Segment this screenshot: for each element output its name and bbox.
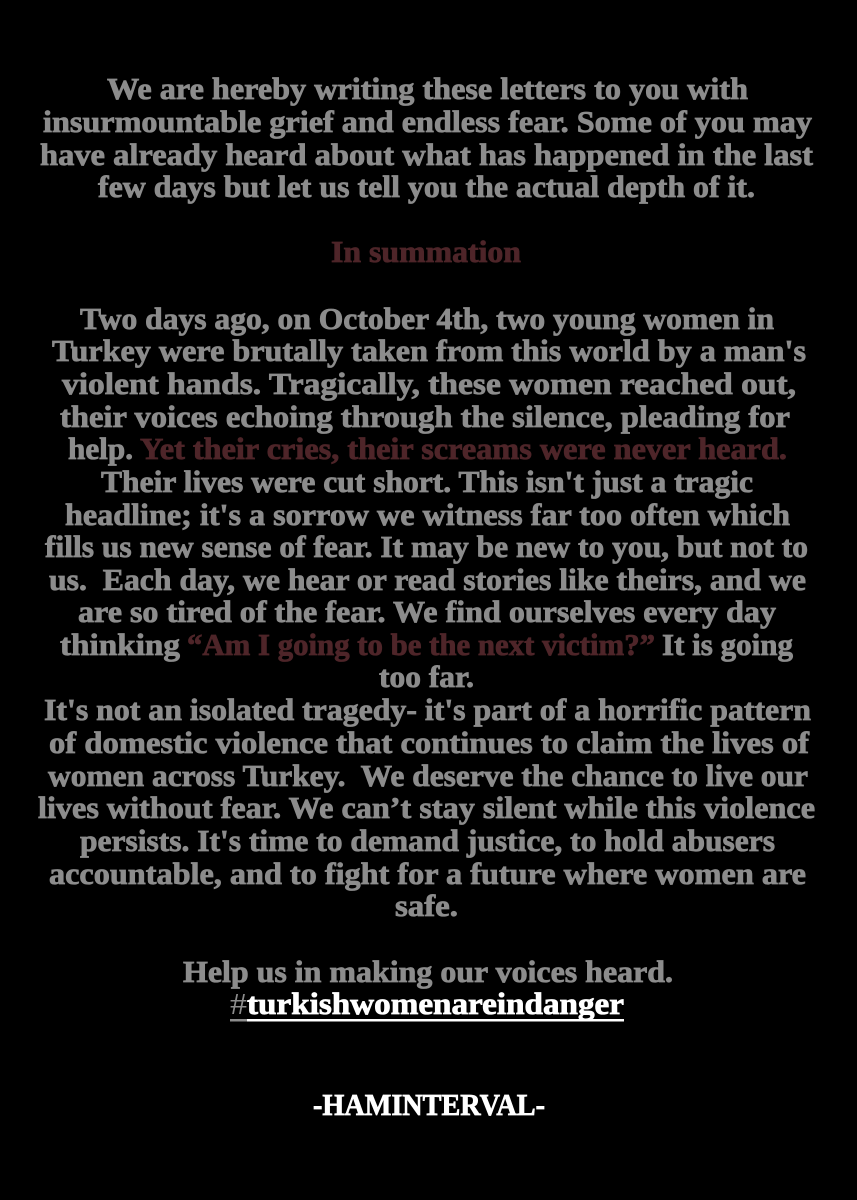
intro paragraph <box>40 71 814 204</box>
main paragraph one: are so tired of the fear. We find ourselves every day <box>78 594 777 629</box>
main paragraph one: Turkey were brutally taken from this world by a man's <box>52 333 806 368</box>
main paragraph one: help. <box>68 431 133 466</box>
main paragraph one: too far. <box>379 659 474 694</box>
main paragraph one: us. Each day, we hear or read stories like theirs, and we <box>49 562 806 597</box>
main paragraph two: accountable, and to fight for a future where women are <box>49 856 806 891</box>
main paragraph two: of domestic violence that continues to claim the lives of <box>49 725 810 760</box>
hashtag: turkishwomenareindanger <box>247 986 624 1021</box>
main paragraph one: violent hands. Tragically, these women reached out, <box>62 366 796 401</box>
main paragraph one: Yet their cries, their screams were never heard. <box>140 431 787 466</box>
signature: -HAMINTERVAL- <box>313 1087 545 1122</box>
intro paragraph: We are hereby writing these letters to you with <box>107 71 748 106</box>
main paragraph two: persists. It's time to demand justice, to hold abusers <box>80 823 775 858</box>
main paragraph two: It's not an isolated tragedy- it's part of a horrific pattern <box>44 692 811 727</box>
main paragraph one: headline; it's a sorrow we witness far too often which <box>65 497 790 532</box>
hashtag: # <box>230 986 247 1021</box>
main paragraph two: women across Turkey. We deserve the chance to live our <box>48 758 808 793</box>
main paragraph one: thinking <box>60 627 181 662</box>
main paragraph one <box>45 301 808 694</box>
main paragraph two <box>38 692 815 923</box>
main paragraph two: lives without fear. We can’t stay silent while this violence <box>38 790 815 825</box>
main paragraph one: fills us new sense of fear. It may be new to you, but not to <box>45 529 808 564</box>
main paragraph one: “Am I going to be the next victim?” <box>187 627 655 662</box>
intro paragraph: few days but let us tell you the actual depth of it. <box>98 169 755 204</box>
call to action: Help us in making our voices heard. <box>183 954 673 989</box>
main paragraph one: their voices echoing through the silence, pleading for <box>60 399 790 434</box>
heading: In summation: In summation <box>331 234 521 269</box>
intro paragraph: insurmountable grief and endless fear. Some of you may <box>43 104 813 139</box>
main paragraph one: Their lives were cut short. This isn't just a tragic <box>101 464 753 499</box>
main paragraph two: safe. <box>395 888 458 923</box>
main paragraph one: It is going <box>662 627 793 662</box>
main paragraph one: Two days ago, on October 4th, two young women in <box>80 301 774 336</box>
intro paragraph: have already heard about what has happened in the last <box>40 137 814 172</box>
